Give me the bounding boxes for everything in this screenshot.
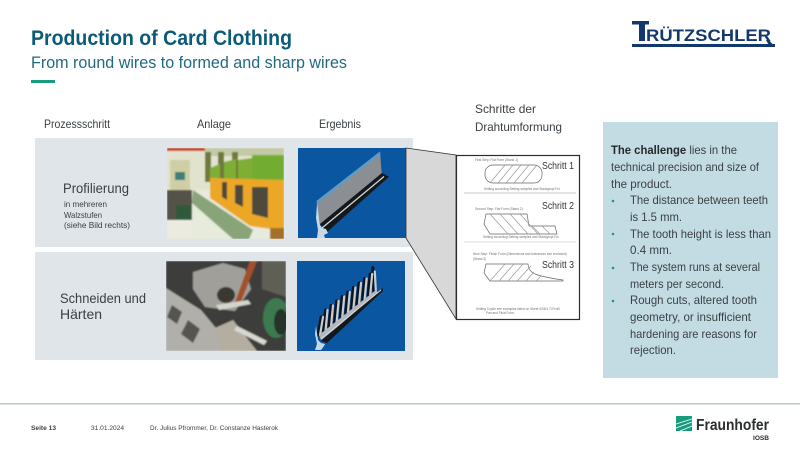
logo: Fraunhofer IOSB [676,416,770,442]
bullet: rejection reasons: Rough cuts, altered tooth [630,293,757,307]
result image: formed wire on blue [298,148,406,238]
text: Schneiden und Härten: Härten [60,306,102,322]
text: Profilierung: Walzstufen [64,210,102,220]
bullet: rejection reasons [612,293,757,357]
accent bar [31,80,55,83]
subtitle: From round wires to formed and sharp wires [31,53,347,72]
result image: toothed wire on blue [297,261,405,351]
column heading: Prozessschritt: Prozessschritt [44,117,111,131]
label: Schritt 1: Schritt 1 [542,160,574,172]
footer rule [0,403,800,404]
panel: the challenge [603,122,778,378]
column heading: Schritte der Drahtumformung [475,102,562,134]
column heading: Schritte der Drahtumformung: Schritte der [475,102,536,116]
bullet: tooth distance: is 1.5 mm. [630,210,682,224]
bullet: tooth distance [612,193,768,224]
drawing: wire profile step 3 [484,264,563,281]
text: Profilierung: Profilierung [63,180,129,196]
text: Profilierung: (siehe Bild rechts) [64,220,130,230]
fine print captions: Second Step: Flat Form (Stand 2) [475,207,523,211]
fine print captions: Setting Cuplie see examples listed on Sheet 4/05/1.Ti Profil [476,307,560,311]
fine print captions: Setting according Setting samples and Stackgrupl Fol [483,235,559,239]
diagram: Schritte der Drahtumformung [456,156,580,320]
fine print captions: Setting according Setting samples and Stackgrupl Fol [484,187,560,191]
text: Profilierung: in mehreren [64,199,107,209]
bullet: rejection reasons: rejection. [630,343,676,357]
zoom callout wedge [406,148,456,319]
column heading: Anlage: Anlage [197,117,231,131]
panel: Profilierung row [35,138,413,247]
bullet: system speed [612,260,760,291]
bullet: system speed: meters per second. [630,277,724,291]
text: Schneiden und Härten [60,290,146,322]
photo: cutting and hardening tooling [166,261,289,351]
bullet: system speed: The system runs at several [630,260,760,274]
footer: page number: Seite 13 [31,425,56,432]
text: Schneiden und Härten: Schneiden und [60,290,146,306]
intro text: the product. [611,177,672,191]
bullet: tooth height: 0.4 mm. [630,243,672,257]
logo: Fraunhofer IOSB: IOSB [753,436,770,442]
label: Schritt 2: Schritt 2 [542,200,574,212]
drawing: wire profile step 1 [485,165,542,183]
logo: Fraunhofer IOSB: Fraunhofer [696,417,769,434]
photo: rolling line machinery [167,148,284,239]
panel: Schneiden und Härten row [35,252,413,360]
drawing: wire profile step 2 [484,214,557,234]
footer: authors: Dr. Julius Pfrommer, Dr. Constanze Hasterok [150,425,279,432]
bullet: tooth height [612,227,771,257]
fine print captions: Pan and Final Form. [486,311,515,315]
intro text [611,143,760,191]
logo: Trützschler: RÜTZSCHLER [646,26,771,45]
fine print captions [473,158,567,315]
fine print captions: First Step: Flat Form (Stand 1) [475,158,518,162]
logo: Trützschler [632,21,775,47]
column heading: Ergebnis: Ergebnis [319,117,361,131]
bullet: tooth height: The tooth height is less than [630,227,771,241]
label: Schritt 3: Schritt 3 [542,259,574,271]
bullet: rejection reasons: geometry, or insufficient [630,310,752,324]
fine print captions: Next Step: Finish Form (Dimensions and tolerances see enclosed) [473,252,567,256]
intro text: The challenge lies in the [611,143,737,157]
column heading: Schritte der Drahtumformung: Drahtumformung [475,120,562,134]
bullet: tooth distance: The distance between teeth [630,193,768,207]
bullet: rejection reasons: hardening are reasons for [630,327,757,341]
footer: date: 31.01.2024 [91,425,124,432]
intro text: technical precision and size of [611,160,760,174]
title: Production of Card Clothing [31,27,292,50]
fine print captions: (Stand 3) [473,257,486,261]
text: Profilierung [63,180,130,230]
